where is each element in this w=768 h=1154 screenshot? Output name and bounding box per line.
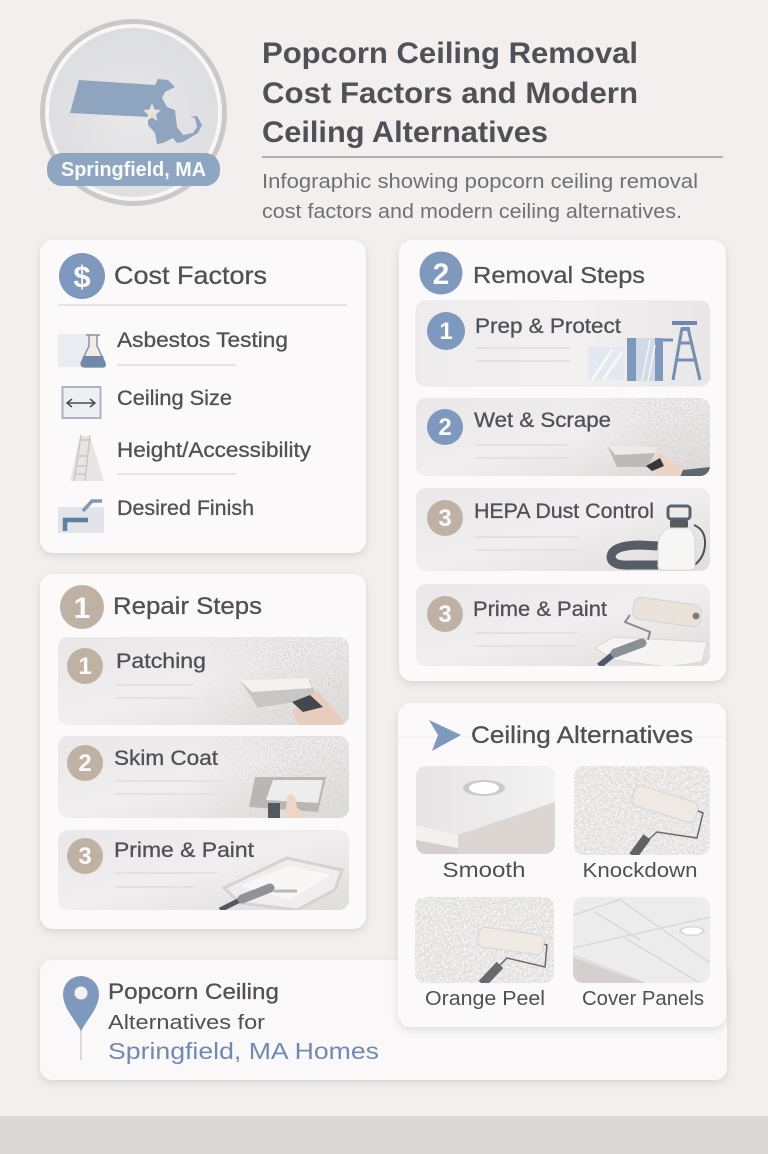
subtitle: cost factors and modern ceiling alternatives. [262,201,682,223]
icon: ceiling size [62,387,100,418]
step: prime and paint: 3 [438,601,452,628]
title [262,37,638,149]
panel: footer banner [40,960,727,1080]
subtitle [262,171,698,223]
step: prime and paint [58,830,349,910]
heading: ceiling alternatives: Ceiling Alternatives [471,722,693,749]
panel: cost factors [40,240,366,553]
icon: map pin [63,976,99,1060]
step: prime and paint: Prime & Paint [114,839,254,862]
title: Ceiling Alternatives [262,116,548,149]
badge: removal number: 2 [433,258,449,291]
location pill [47,153,220,186]
footer text: Springfield, MA Homes [108,1038,379,1064]
item: asbestos testing: Asbestos Testing [117,329,288,352]
step: skim coat [58,736,350,818]
subtitle: Infographic showing popcorn ceiling removal [262,171,698,193]
footer text: Alternatives for [108,1012,265,1034]
card: smooth: Smooth [442,859,526,882]
footer text: Popcorn Ceiling [108,979,279,1004]
card: smooth [416,766,555,882]
step: prep and protect: 1 [439,318,453,345]
heading: cost factors: Cost Factors [114,262,267,290]
card: knockdown: Knockdown [582,860,698,882]
step: prep and protect: Prep & Protect [475,315,621,338]
heading: removal steps: Removal Steps [473,262,645,288]
heading: repair steps: Repair Steps [113,593,262,620]
title: Popcorn Ceiling Removal [262,37,638,70]
step: wet and scrape: Wet & Scrape [474,409,611,432]
step: prime and paint [416,584,710,667]
panel: removal steps [399,240,726,681]
badge: Springfield, MA [42,22,224,204]
badge: repair number: 1 [74,592,90,625]
card: orange peel [415,897,554,1010]
bottom band [0,1116,768,1154]
icon: star [143,103,161,121]
step: HEPA dust control: HEPA Dust Control [474,500,654,523]
step: prime and paint: 3 [78,843,92,870]
icon: dollar [59,253,105,299]
step: skim coat: Skim Coat [114,747,218,770]
card: cover panels [573,897,710,1010]
step: patching [58,637,350,727]
step: patching: 1 [78,653,92,680]
panel: ceiling alternatives [398,703,726,1027]
icon: ladder [70,435,104,481]
icon: asbestos flask [58,334,106,367]
step: skim coat: 2 [78,750,92,777]
step: patching: Patching [116,650,206,673]
item: height accessibility: Height/Accessibility [117,439,312,462]
footer text [108,979,379,1064]
step: wet and scrape: 2 [438,414,452,441]
card: cover panels: Cover Panels [582,988,704,1010]
panel: repair steps [40,574,366,929]
icon: dollar: $ [73,259,91,294]
item: ceiling size: Ceiling Size [117,387,232,410]
icon: arrow [429,720,461,751]
step: HEPA dust control: 3 [438,505,452,532]
location pill: Springfield, MA [61,159,206,181]
item: desired finish: Desired Finish [117,497,254,520]
step: HEPA dust control [416,488,710,571]
step: prime and paint: Prime & Paint [473,598,607,621]
icon: Massachusetts map [70,79,202,144]
badge: removal number [420,252,462,294]
step: prep and protect [416,301,710,386]
card: orange peel: Orange Peel [425,988,545,1010]
card: knockdown [574,766,710,882]
title: Cost Factors and Modern [262,77,638,110]
step: wet and scrape [416,398,710,477]
icon: desired finish [58,501,104,533]
badge: repair number [60,585,104,629]
